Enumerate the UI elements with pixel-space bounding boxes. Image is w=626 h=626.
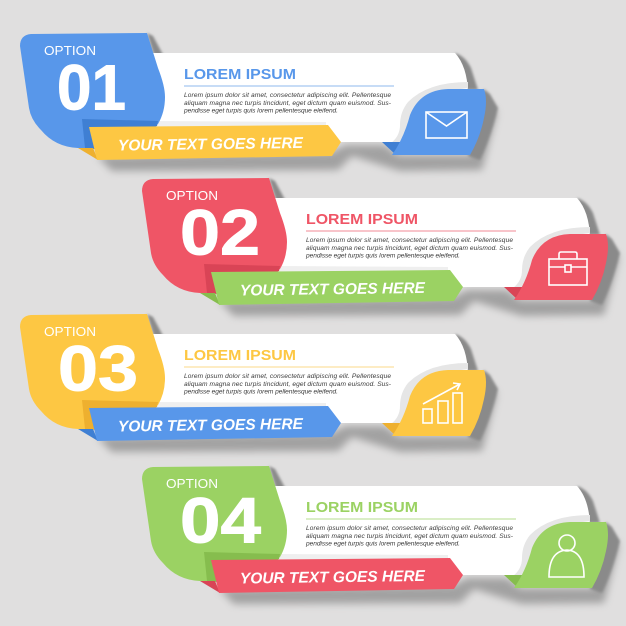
option label: OPTION	[44, 324, 96, 339]
heading: LOREM IPSUM	[184, 66, 296, 83]
ribbon	[211, 558, 463, 593]
ribbon text: YOUR TEXT GOES HERE	[118, 416, 304, 435]
option number: 04	[180, 484, 261, 556]
body text	[305, 237, 514, 260]
icon tile fold	[504, 568, 542, 588]
icon tile	[514, 522, 608, 588]
option label: OPTION	[166, 476, 218, 491]
heading: LOREM IPSUM	[306, 211, 418, 228]
body text: Lorem ipsum dolor sit amet, consectetur adipiscing elit. Pellentesque	[184, 373, 391, 380]
body text	[183, 92, 392, 115]
icon tile	[392, 370, 486, 436]
panel: option 03	[20, 314, 498, 452]
white content card	[272, 198, 590, 287]
option number: 03	[58, 332, 138, 404]
ribbon flap	[200, 293, 220, 305]
body text: Lorem ipsum dolor sit amet, consectetur adipiscing elit. Pellentesque	[306, 525, 513, 532]
icon tile fold	[382, 416, 420, 436]
panel: option 04	[142, 466, 620, 604]
ribbon	[89, 406, 341, 441]
tab fold	[204, 264, 280, 294]
body text: pendisse eget turpis quis lorem pellentesque eleifend.	[305, 541, 460, 548]
icon: envelope	[426, 112, 467, 138]
ribbon text: YOUR TEXT GOES HERE	[240, 280, 426, 299]
icon tile	[392, 89, 486, 155]
heading: LOREM IPSUM	[306, 499, 418, 516]
icon tile	[514, 234, 608, 300]
option label: OPTION	[44, 43, 96, 58]
white content card	[272, 486, 590, 575]
white content card	[150, 334, 468, 423]
ribbon flap	[78, 429, 98, 441]
option number: 02	[180, 196, 260, 268]
ribbon	[89, 125, 341, 160]
ribbon text: YOUR TEXT GOES HERE	[240, 568, 426, 587]
option tab	[20, 33, 165, 149]
icon: person	[549, 535, 584, 577]
panel: option 01	[20, 33, 498, 171]
option tab	[142, 466, 287, 582]
ribbon	[211, 270, 463, 305]
icon tile fold	[382, 135, 420, 155]
body text: aliquam magna nec turpis tincidunt, eget dictum quam euismod. Sus-	[184, 100, 392, 107]
ribbon flap	[200, 581, 220, 593]
option tab	[142, 178, 287, 294]
option tab	[20, 314, 165, 430]
body text: aliquam magna nec turpis tincidunt, eget dictum quam euismod. Sus-	[306, 533, 514, 540]
icon tile fold	[504, 280, 542, 300]
heading: LOREM IPSUM	[184, 347, 296, 364]
icon: briefcase	[549, 252, 587, 285]
icon: growth chart	[423, 383, 462, 423]
body text: Lorem ipsum dolor sit amet, consectetur adipiscing elit. Pellentesque	[184, 92, 391, 99]
body text	[183, 373, 392, 396]
body text: aliquam magna nec turpis tincidunt, eget dictum quam euismod. Sus-	[306, 245, 514, 252]
tab fold	[204, 552, 280, 582]
body text: aliquam magna nec turpis tincidunt, eget dictum quam euismod. Sus-	[184, 381, 392, 388]
body text: Lorem ipsum dolor sit amet, consectetur adipiscing elit. Pellentesque	[306, 237, 513, 244]
tab fold	[82, 400, 158, 430]
body text: pendisse eget turpis quis lorem pellentesque eleifend.	[305, 253, 460, 260]
option number: 01	[57, 52, 126, 124]
tab fold	[82, 119, 158, 149]
body text: pendisse eget turpis quis lorem pellentesque eleifend.	[183, 389, 338, 396]
ribbon text: YOUR TEXT GOES HERE	[118, 135, 304, 154]
body text	[305, 525, 514, 548]
panel: option 02	[142, 178, 620, 316]
option label: OPTION	[166, 188, 218, 203]
ribbon flap	[78, 148, 98, 160]
body text: pendisse eget turpis quis lorem pellentesque eleifend.	[183, 108, 338, 115]
white content card	[150, 53, 468, 142]
